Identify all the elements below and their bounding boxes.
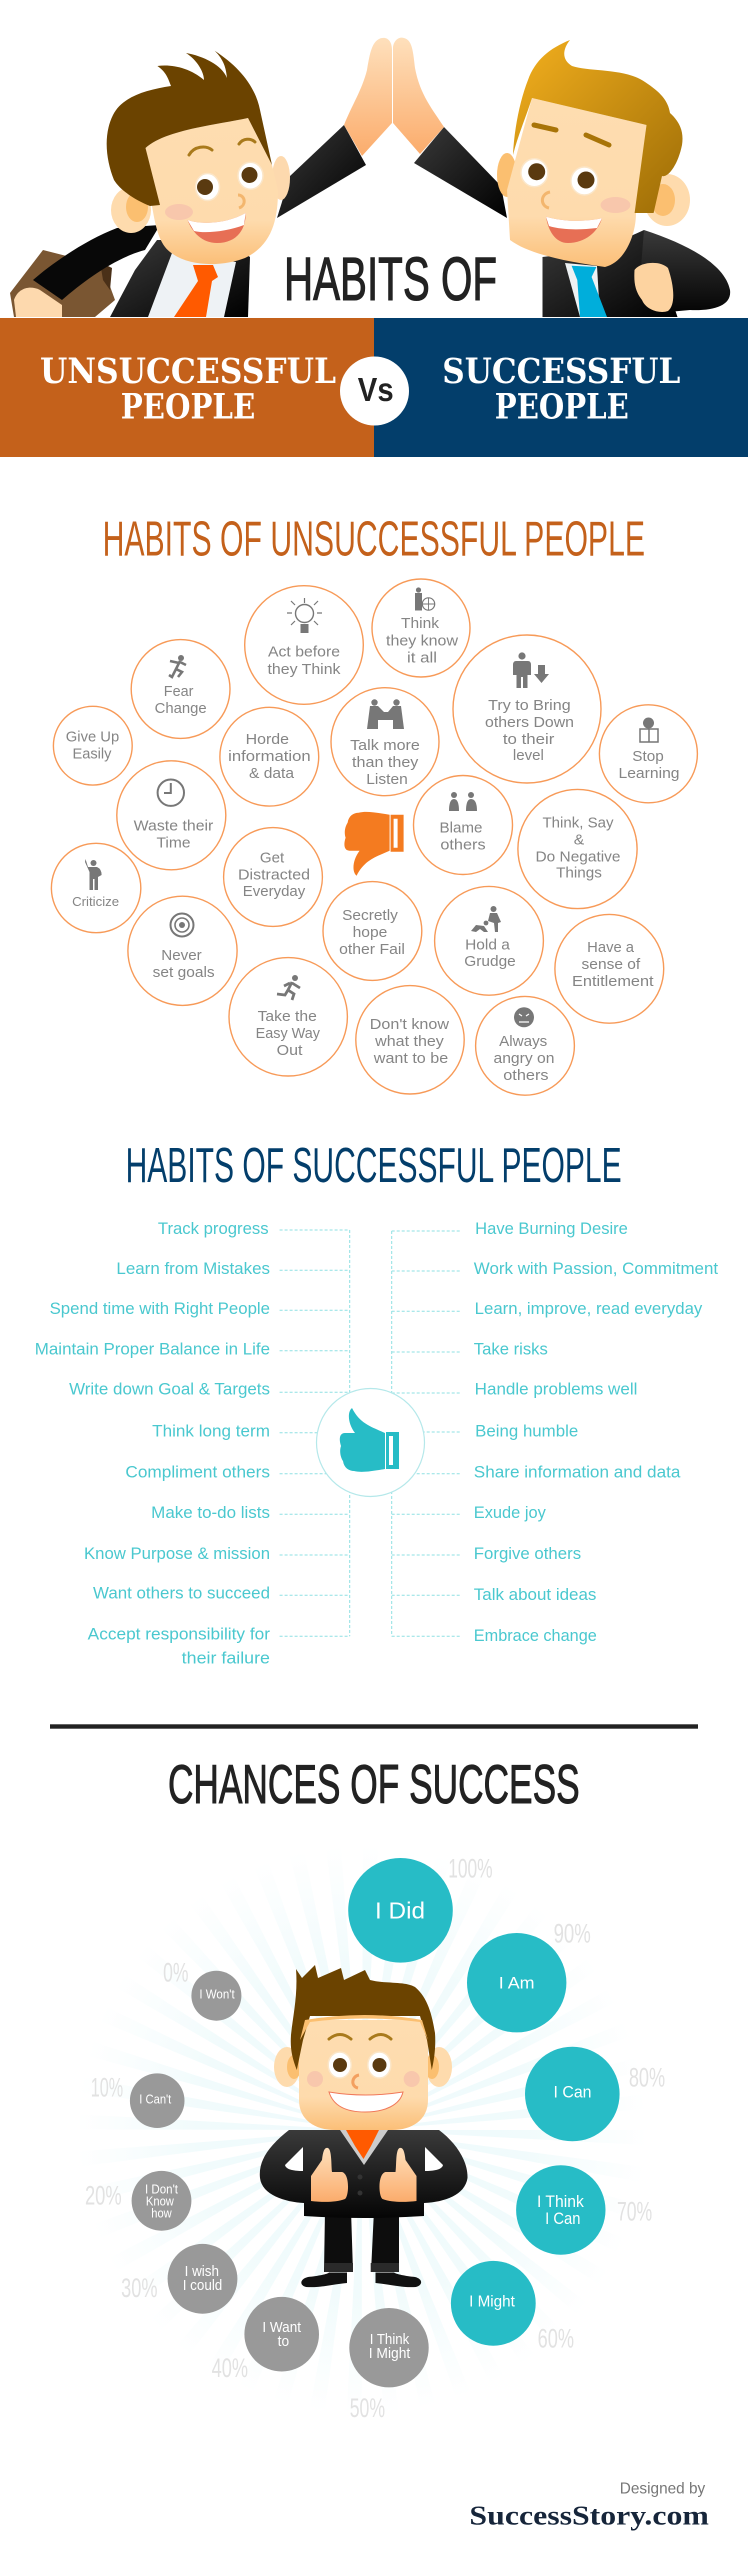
bubble: i want to 40% (212, 2297, 319, 2383)
bubble: i am 90% (467, 1918, 591, 2032)
bubble: i wish i could 30%: I could (183, 2277, 222, 2294)
bubble: talk more than they listen: than they (352, 755, 419, 771)
bubble: secretly hope other fail: Secretly (342, 908, 399, 924)
bubble: try to bring others down (453, 635, 601, 783)
list: successful habits left column: Maintain Proper Balance in Life (35, 1341, 270, 1359)
bubble: talk more than they listen: Talk more (350, 738, 420, 754)
bubble: i can 80% (525, 2047, 665, 2141)
bubble: i won't 0%: I Won't (199, 1987, 235, 2001)
bubble cluster: unsuccessful habits (51, 579, 697, 1095)
bubble: hold a grudge: Hold a (465, 937, 511, 953)
bubble: i did 100%: 100% (448, 1853, 493, 1883)
bubble: criticize (51, 843, 141, 933)
bubble: i can't 10%: I Can't (139, 2093, 172, 2107)
bubble: i wish i could 30% (121, 2244, 237, 2314)
bubble: waste their time (117, 761, 226, 870)
bubble: i think i might 50%: I Might (369, 2345, 411, 2362)
list: successful habits right column: Being humble (475, 1422, 578, 1440)
bubble: i can 80%: 80% (629, 2063, 665, 2093)
bubble: i might 60%: I Might (469, 2294, 515, 2311)
bubble: sense of entitlement: Entitlement (572, 974, 654, 990)
bubble: i can't 10% (91, 2073, 184, 2128)
bubble: i think i might 50% (349, 2308, 429, 2423)
bubble: i think i might 50%: 50% (350, 2393, 385, 2423)
bubble: horde information: & data (249, 766, 295, 782)
character: successful man (393, 38, 730, 317)
bubble: blame others (414, 776, 512, 874)
bubble: waste their time: Time (156, 836, 190, 852)
bubble: secretly hope other fail (323, 882, 422, 980)
sunburst rays (212, 1980, 512, 2280)
bubble: try to bring others down: to their (503, 732, 555, 748)
list: successful habits left column: Make to-do lists (151, 1504, 270, 1522)
list: successful habits right column: Exude joy (474, 1504, 547, 1522)
bubble: act before they think: Act before (268, 644, 340, 660)
bubble: act before they think: they Think (268, 662, 341, 678)
bubble: secretly hope other fail: hope (353, 925, 387, 941)
bubble: i am 90%: 90% (554, 1918, 591, 1948)
bubble: think say do negative things: & (574, 833, 585, 849)
bubble: think say do negative things: Things (556, 866, 602, 882)
bubble: get distracted everyday: Get (260, 850, 284, 866)
banner: unsuccessful vs successful: SUCCESSFUL (442, 351, 680, 392)
list: successful habits left column: Write down Goal & Targets (69, 1381, 270, 1399)
bubble: i did 100% (348, 1853, 493, 1963)
list: successful habits right column: Have Burning Desire (475, 1220, 628, 1238)
bubble: try to bring others down: level (513, 748, 544, 764)
bubble: i don't know how 20%: I Don't (145, 2182, 178, 2196)
bubble: waste their time: Waste their (134, 819, 214, 835)
bubble: take the easy way out: Easy Way (256, 1026, 321, 1042)
bubble: think they know it all: they know (386, 633, 459, 649)
bubble: i might 60% (451, 2261, 574, 2353)
bubble: i think i can 70%: I Think (537, 2193, 585, 2211)
footer: designed by credit (469, 2480, 710, 2530)
list: successful habits right column: Embrace change (474, 1627, 597, 1645)
connector lines: dashed tree (280, 1230, 461, 1636)
bubble: give up easily: Give Up (66, 730, 119, 746)
bubble: think say do negative things: Do Negative (536, 850, 620, 866)
banner: unsuccessful vs successful (0, 318, 748, 457)
footer: designed by credit: SuccessStory.com (469, 2500, 710, 2530)
bubble: horde information (220, 707, 319, 806)
icon: thumbs up in circle (316, 1388, 424, 1496)
character: thumbs up businessman (260, 1965, 468, 2287)
list: successful habits right column: Take risks (474, 1341, 548, 1359)
bubble: think they know it all: it all (407, 650, 437, 666)
bubble: horde information: Horde (246, 732, 289, 748)
bubble: i wish i could 30%: I wish (185, 2263, 219, 2280)
bubble: i want to 40%: I Want (262, 2319, 302, 2336)
icon: thumbs down (344, 812, 404, 876)
percentage bubbles: chances of success (85, 1853, 665, 2423)
bubble: i think i can 70% (516, 2165, 652, 2255)
list: successful habits left column: Want others to succeed (93, 1585, 270, 1603)
bubble: always angry on others: angry on (494, 1051, 554, 1067)
bubble: never set goals: set goals (153, 965, 215, 981)
bubble: give up easily (53, 706, 132, 785)
bubble: sense of entitlement: Have a (587, 940, 635, 956)
bubble: fear change (131, 640, 230, 738)
bubble: i might 60%: 60% (538, 2323, 574, 2353)
banner: unsuccessful vs successful: PEOPLE (121, 386, 255, 428)
list: successful habits left column: Compliment others (125, 1463, 270, 1481)
list: successful habits right column: Learn, improve, read everyday (475, 1300, 703, 1318)
bubble: i won't 0% (163, 1957, 241, 2021)
bubble: stop learning: Learning (618, 766, 680, 782)
footer: designed by credit: Designed by (620, 2480, 705, 2497)
bubble: think they know it all: Think (401, 616, 440, 632)
bubble: i am 90%: I Am (499, 1973, 535, 1992)
bubble: blame others: others (440, 838, 486, 854)
bubble: sense of entitlement (555, 914, 664, 1023)
bubble: blame others: Blame (440, 821, 482, 837)
bubble: take the easy way out: Out (277, 1043, 302, 1059)
list: successful habits right column (474, 1220, 719, 1645)
bubble: don't know what they want to be: Don't know (370, 1017, 450, 1033)
bubble: i don't know how 20% (85, 2171, 191, 2231)
bubble: i did 100%: I Did (375, 1897, 425, 1923)
bubble: take the easy way out (229, 958, 347, 1076)
bubble: criticize: Criticize (72, 895, 119, 909)
bubble: i won't 0%: 0% (163, 1957, 188, 1987)
bubble: get distracted everyday (224, 828, 322, 926)
bubble: never set goals (128, 896, 237, 1005)
bubble: i wish i could 30%: 30% (121, 2273, 157, 2303)
bubble: don't know what they want to be (356, 986, 464, 1094)
bubble: never set goals: Never (161, 948, 202, 964)
bubble: i don't know how 20%: 20% (85, 2180, 122, 2210)
bubble: hold a grudge (435, 886, 543, 995)
bubble: always angry on others: Always (499, 1034, 547, 1050)
bubble: i can 80%: I Can (554, 2083, 592, 2101)
header: two businessmen high five (10, 38, 730, 317)
bubble: fear change: Change (155, 701, 207, 717)
list: successful habits left column: Spend time with Right People (50, 1300, 270, 1318)
bubble: always angry on others (476, 996, 574, 1095)
character: unsuccessful man (10, 38, 392, 317)
bubble: take the easy way out: Take the (258, 1009, 317, 1025)
banner: unsuccessful vs successful: Vs (358, 371, 394, 408)
bubble: secretly hope other fail: other Fail (339, 942, 405, 958)
bubble: i want to 40%: 40% (212, 2353, 248, 2383)
bubble: sense of entitlement: sense of (582, 957, 641, 973)
bubble: give up easily: Easily (72, 747, 112, 763)
bubble: hold a grudge: Grudge (464, 954, 516, 970)
bubble: fear change: Fear (164, 684, 194, 700)
bubble: don't know what they want to be: want to be (373, 1051, 448, 1067)
list: successful habits left column: Know Purpose & mission (84, 1545, 270, 1563)
bubble: i can't 10%: 10% (91, 2073, 123, 2103)
bubble: i think i can 70%: 70% (617, 2196, 652, 2226)
bubble: try to bring others down: others Down (485, 715, 574, 731)
bubble: think say do negative things: Think, Say (542, 816, 614, 832)
bubble: act before they think (245, 586, 363, 704)
divider rule (50, 1724, 698, 1729)
list: successful habits left column: Think long term (152, 1422, 270, 1440)
banner: unsuccessful vs successful: UNSUCCESSFUL (40, 351, 336, 392)
bubble: i don't know how 20%: how (151, 2206, 173, 2220)
bubble: talk more than they listen (331, 688, 439, 796)
bubble: i think i can 70%: I Can (545, 2210, 580, 2228)
bubble: try to bring others down: Try to Bring (488, 698, 571, 714)
list: successful habits left column: Track progress (158, 1220, 269, 1238)
banner: unsuccessful vs successful: PEOPLE (495, 386, 629, 428)
list: successful habits right column: Work with Passion, Commitment (474, 1260, 719, 1278)
bubble: don't know what they want to be: what they (374, 1034, 445, 1050)
bubble: get distracted everyday: Distracted (238, 867, 310, 883)
bubble: think say do negative things (518, 789, 637, 909)
list: successful habits right column: Talk about ideas (474, 1586, 596, 1604)
bubble: horde information: information (228, 749, 311, 765)
list: successful habits right column: Share information and data (474, 1463, 681, 1481)
bubble: always angry on others: others (503, 1068, 549, 1084)
list: successful habits left column: their failure (182, 1650, 270, 1668)
heading: habits of: HABITS OF (284, 245, 497, 313)
list: successful habits left column: Learn from Mistakes (116, 1260, 270, 1278)
bubble: i want to 40%: to (278, 2333, 289, 2350)
bubble: i don't know how 20%: Know (146, 2194, 175, 2208)
bubble: think they know it all (372, 579, 470, 677)
list: successful habits right column: Forgive others (474, 1545, 581, 1563)
bubble: talk more than they listen: Listen (366, 772, 408, 788)
list: successful habits left column: Accept responsibility for (88, 1626, 271, 1644)
bubble: stop learning: Stop (632, 749, 664, 765)
bubble: i think i might 50%: I Think (370, 2331, 410, 2348)
bubble: stop learning (599, 705, 697, 803)
list: successful habits right column: Handle problems well (475, 1381, 637, 1399)
list: successful habits left column (35, 1220, 271, 1668)
bubble: get distracted everyday: Everyday (243, 884, 306, 900)
